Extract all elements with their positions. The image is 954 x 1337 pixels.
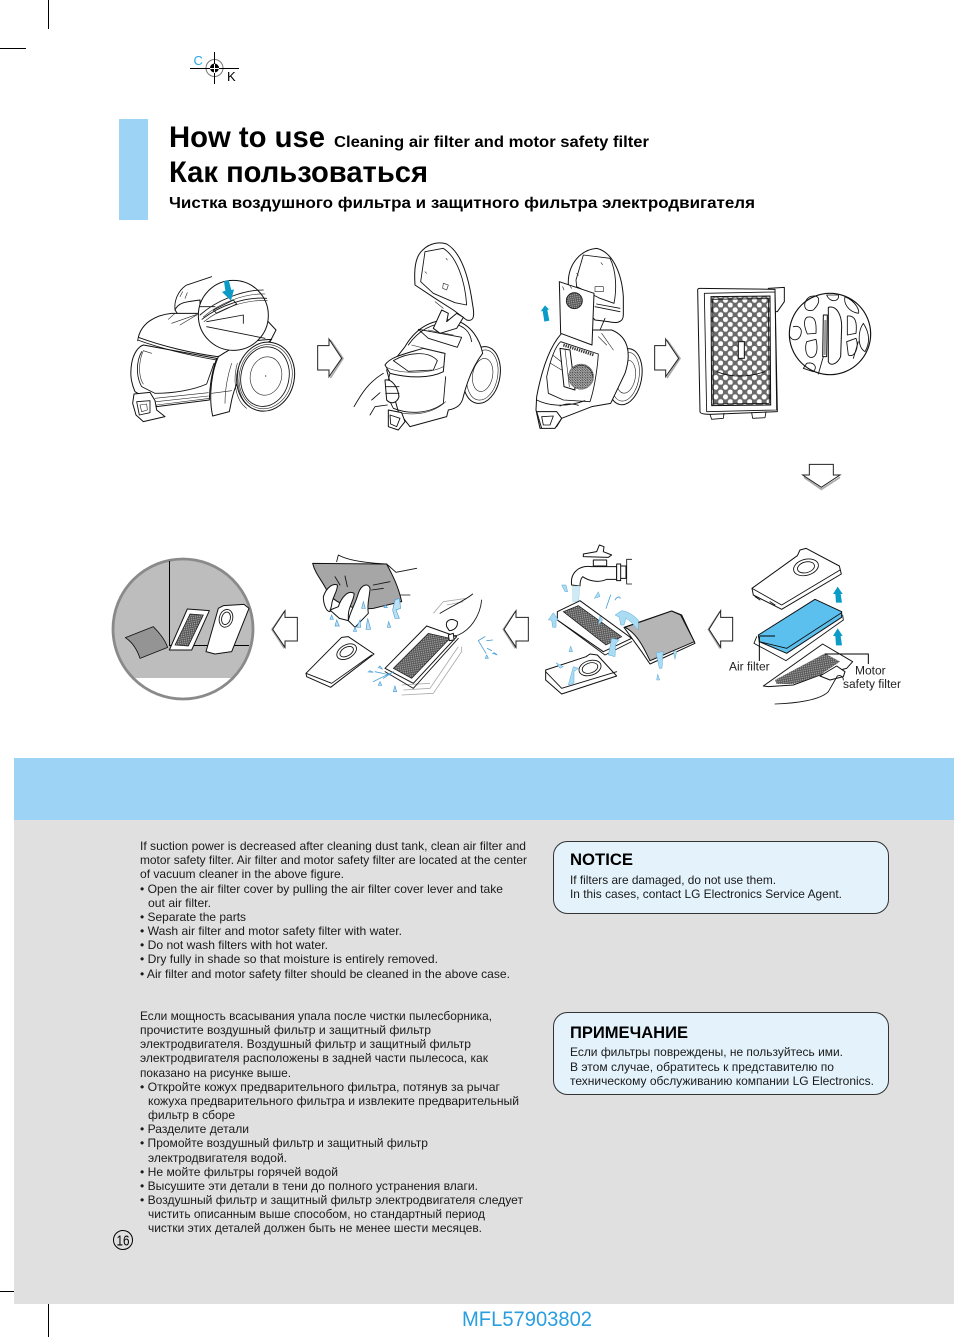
registration mark C K: C: [194, 53, 203, 68]
illustration: filter parts separated: [729, 548, 901, 704]
text block: Russian instructions: электродвигателя. Воздушный фильтр и защитный фильтр: [140, 1037, 471, 1051]
air filter blue: [758, 599, 842, 653]
grey content panel: [14, 820, 954, 1304]
magnified detail: [789, 293, 871, 375]
notice box English: In this cases, contact LG Electronics Service Agent.: [570, 887, 842, 901]
notice box Russian: ПРИМЕЧАНИЕ: [570, 1023, 688, 1042]
text block: Russian instructions: • Не мойте фильтры горячей водой: [140, 1165, 338, 1179]
illustration: pressing the filter cover lever: [131, 277, 301, 422]
arrow left 2: [503, 611, 528, 648]
illustration: filter parts separated: Motor: [855, 664, 886, 678]
arrow left 1: [708, 611, 733, 648]
water splashes: [548, 585, 677, 685]
illustration: washing under tap: [546, 545, 695, 694]
text block: Russian instructions: [140, 1009, 523, 1235]
body: [131, 345, 217, 407]
body shell: [387, 320, 483, 427]
text block: English instructions: [140, 839, 527, 981]
illustration: filter pulled out of vacuum: [536, 248, 646, 428]
callout lines: [759, 636, 868, 664]
notice box Russian: Если фильтры повреждены, не пользуйтесь ими.: [570, 1045, 843, 1059]
text block: Russian instructions: • Разделите детали: [140, 1122, 249, 1136]
title block: Как пользоваться: [169, 156, 428, 189]
lid: [415, 243, 474, 320]
part number: MFL57903802: [462, 1308, 592, 1331]
notice box English: [554, 842, 888, 914]
hand: [385, 380, 399, 403]
illustration: filter parts separated: safety filter: [843, 677, 901, 691]
text block: Russian instructions: фильтр в сборе: [148, 1108, 235, 1122]
arrow left 3: [272, 611, 297, 648]
text block: Russian instructions: электродвигателя расположены в задней части пылесоса, как: [140, 1051, 489, 1065]
text block: Russian instructions: электродвигателя водой.: [148, 1151, 287, 1165]
text block: English instructions: out air filter.: [148, 896, 211, 910]
lid: [568, 248, 623, 323]
filter cover: [559, 282, 594, 345]
wheel: [459, 344, 505, 406]
crop marks: [0, 0, 48, 1337]
text block: Russian instructions: чистить описанным выше способом, но стандартный период: [148, 1207, 485, 1221]
title block: Чистка воздушного фильтра и защитного фильтра электродвигателя: [169, 195, 755, 212]
dust tank: [385, 348, 445, 377]
illustration: filter with honeycomb detail: [698, 287, 871, 419]
icon: up arrows: [833, 587, 843, 603]
text block: English instructions: motor safety filter. Air filter and motor safety filter are located at the center: [140, 853, 527, 867]
icon: blue up arrow: [541, 305, 549, 322]
text block: Russian instructions: • Промойте воздушный фильтр и защитный фильтр: [140, 1136, 428, 1150]
title accent bar: [119, 119, 148, 220]
text block: Russian instructions: кожуха предварительного фильтра и извлеките предварительный: [148, 1094, 519, 1108]
notice box Russian: техническому обслуживанию компании LG Electronics.: [570, 1074, 874, 1088]
text block: Russian instructions: • Откройте кожух предварительного фильтра, потянув за рычаг: [140, 1080, 501, 1094]
illustration: drying in the shade circle: [110, 559, 260, 708]
text block: Russian instructions: Если мощность всасывания упала после чистки пылесборника,: [140, 1009, 492, 1023]
arrow down: [803, 464, 840, 489]
text block: English instructions: • Separate the parts: [140, 910, 246, 924]
notice box English: NOTICE: [570, 850, 633, 869]
text block: English instructions: • Do not wash filters with hot water.: [140, 938, 328, 952]
page number: 16: [116, 1232, 130, 1250]
title block: Cleaning air filter and motor safety filter: [334, 134, 649, 151]
text block: English instructions: • Wash air filter and motor safety filter with water.: [140, 924, 402, 938]
blue band: [14, 758, 954, 820]
text block: Russian instructions: • Воздушный фильтр и защитный фильтр электродвигателя следует: [140, 1193, 523, 1207]
illustration: wringing and shaking filters: [306, 555, 497, 695]
nozzle: [133, 392, 165, 422]
title block: [169, 121, 755, 212]
text block: Russian instructions: чистки этих деталей должен быть не менее шести месяцев.: [148, 1221, 482, 1235]
text block: English instructions: • Dry fully in shade so that moisture is entirely removed.: [140, 952, 438, 966]
text block: English instructions: • Open the air filter cover by pulling the air filter cover lever and take: [140, 882, 503, 896]
text block: English instructions: If suction power is decreased after cleaning dust tank, clean air filter and: [140, 839, 526, 853]
arrow right 1: [318, 339, 343, 378]
body: [536, 330, 628, 428]
notice box English: If filters are damaged, do not use them.: [570, 873, 776, 887]
text block: English instructions: of vacuum cleaner in the above figure.: [140, 867, 344, 881]
icon: blue down arrow: [222, 280, 234, 301]
illustration: open cover with dust tank removed: [354, 243, 505, 430]
center column: [211, 339, 272, 416]
text block: Russian instructions: показано на рисунке выше.: [140, 1066, 291, 1080]
notice box Russian: [554, 1012, 888, 1094]
wheel: [230, 337, 301, 417]
lid: [138, 313, 276, 357]
text block: Russian instructions: прочистите воздушный фильтр и защитный фильтр: [140, 1023, 431, 1037]
text block: Russian instructions: • Высушите эти детали в тени до полного устранения влаги.: [140, 1179, 478, 1193]
illustration: filter parts separated: Air filter: [729, 660, 770, 674]
text block: English instructions: • Air filter and motor safety filter should be cleaned in the above case.: [140, 967, 510, 981]
registration mark C K: K: [227, 69, 236, 84]
title block: How to use: [169, 121, 325, 154]
registration mark C K: [190, 52, 239, 84]
notice box Russian: В этом случае, обратитесь к представителю по: [570, 1060, 834, 1074]
arrow right 2: [655, 339, 680, 378]
